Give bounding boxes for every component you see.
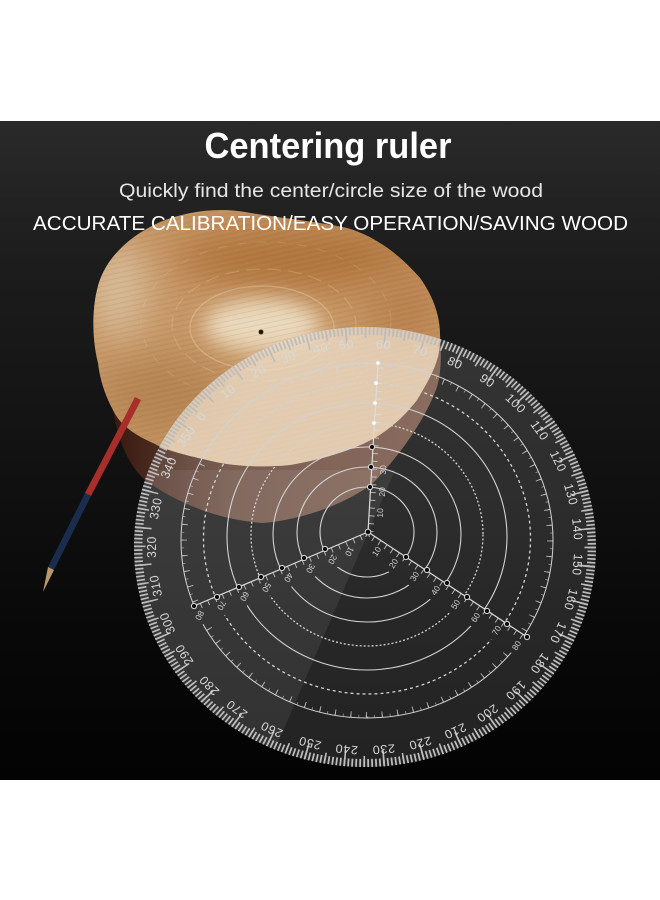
degree numbers: 140 <box>569 518 585 541</box>
spoke numbers: 10 <box>370 545 383 558</box>
spoke numbers: 70 <box>215 599 228 612</box>
spoke numbers: 30 <box>378 465 388 475</box>
background panel <box>0 121 660 780</box>
spoke numbers: 40 <box>282 571 295 584</box>
degree numbers: 190 <box>502 678 529 703</box>
degree numbers: 260 <box>258 718 285 740</box>
degree numbers: 110 <box>527 418 552 443</box>
degree numbers: 280 <box>196 673 222 698</box>
degree numbers: 210 <box>442 720 468 742</box>
degree numbers: 250 <box>297 734 323 752</box>
degree numbers: 100 <box>502 391 529 416</box>
spoke numbers: 30 <box>408 570 421 583</box>
degree numbers: 20 <box>248 362 269 381</box>
degree numbers: 90 <box>477 371 498 391</box>
wood log <box>85 200 450 523</box>
degree numbers: 350 <box>174 424 199 449</box>
translucent overlap on wood <box>160 327 440 466</box>
feature line: ACCURATE CALIBRATION/EASY OPERATION/SAVING WOOD <box>33 213 628 235</box>
degree numbers: 230 <box>372 741 396 757</box>
spoke numbers: 10 <box>375 508 385 518</box>
center hole <box>259 330 263 334</box>
degree numbers: 60 <box>375 337 392 352</box>
spoke numbers: 40 <box>429 584 442 597</box>
degree numbers: 180 <box>527 651 552 676</box>
degree numbers: 270 <box>223 697 250 721</box>
spoke numbers <box>193 465 523 652</box>
spoke numbers: 50 <box>449 598 462 611</box>
spoke numbers: 60 <box>469 611 482 624</box>
spoke lines <box>194 363 527 640</box>
spoke holes <box>191 361 530 640</box>
spoke numbers: 30 <box>304 562 317 575</box>
subtitle: Quickly find the center/circle size of the wood <box>119 180 543 202</box>
ruler body <box>134 327 596 767</box>
spoke numbers: 20 <box>326 553 339 566</box>
degree numbers: 50 <box>338 337 355 352</box>
degree numbers: 70 <box>411 343 429 359</box>
degree numbers: 320 <box>145 536 159 558</box>
spoke numbers: 20 <box>377 487 387 497</box>
spoke numbers: 80 <box>193 609 206 622</box>
degree numbers: 120 <box>547 448 569 474</box>
degree numbers: 0 <box>194 409 210 424</box>
degree numbers: 10 <box>218 382 239 401</box>
spoke numbers: 10 <box>343 545 356 558</box>
degree numbers: 130 <box>561 482 581 507</box>
degree numbers <box>145 337 585 757</box>
degree numbers: 200 <box>474 701 501 725</box>
pencil <box>43 388 141 592</box>
degree numbers: 170 <box>547 620 569 646</box>
concentric rings <box>181 363 553 718</box>
degree numbers: 40 <box>312 340 330 357</box>
three measuring spokes <box>191 361 530 652</box>
degree numbers: 220 <box>407 734 433 752</box>
degree numbers: 160 <box>561 587 581 612</box>
log top face <box>93 210 440 466</box>
spoke numbers: 20 <box>387 557 400 570</box>
degree numbers: 150 <box>569 553 585 576</box>
degree numbers: 290 <box>172 642 196 667</box>
sheen <box>134 470 395 748</box>
degree numbers: 30 <box>279 349 298 367</box>
spoke numbers: 60 <box>238 590 251 603</box>
spoke numbers: 80 <box>510 639 523 652</box>
degree numbers: 300 <box>157 610 178 636</box>
degree numbers: 240 <box>334 741 358 757</box>
spoke numbers: 50 <box>260 581 273 594</box>
tick marks <box>119 313 611 781</box>
log side bark <box>113 335 441 523</box>
title: Centering ruler <box>204 125 452 166</box>
degree numbers: 330 <box>147 496 165 520</box>
degree numbers: 310 <box>147 574 165 598</box>
degree numbers: 80 <box>445 354 465 372</box>
spoke numbers: 70 <box>490 624 503 637</box>
degree scale <box>119 313 611 781</box>
degree numbers: 340 <box>158 455 180 480</box>
